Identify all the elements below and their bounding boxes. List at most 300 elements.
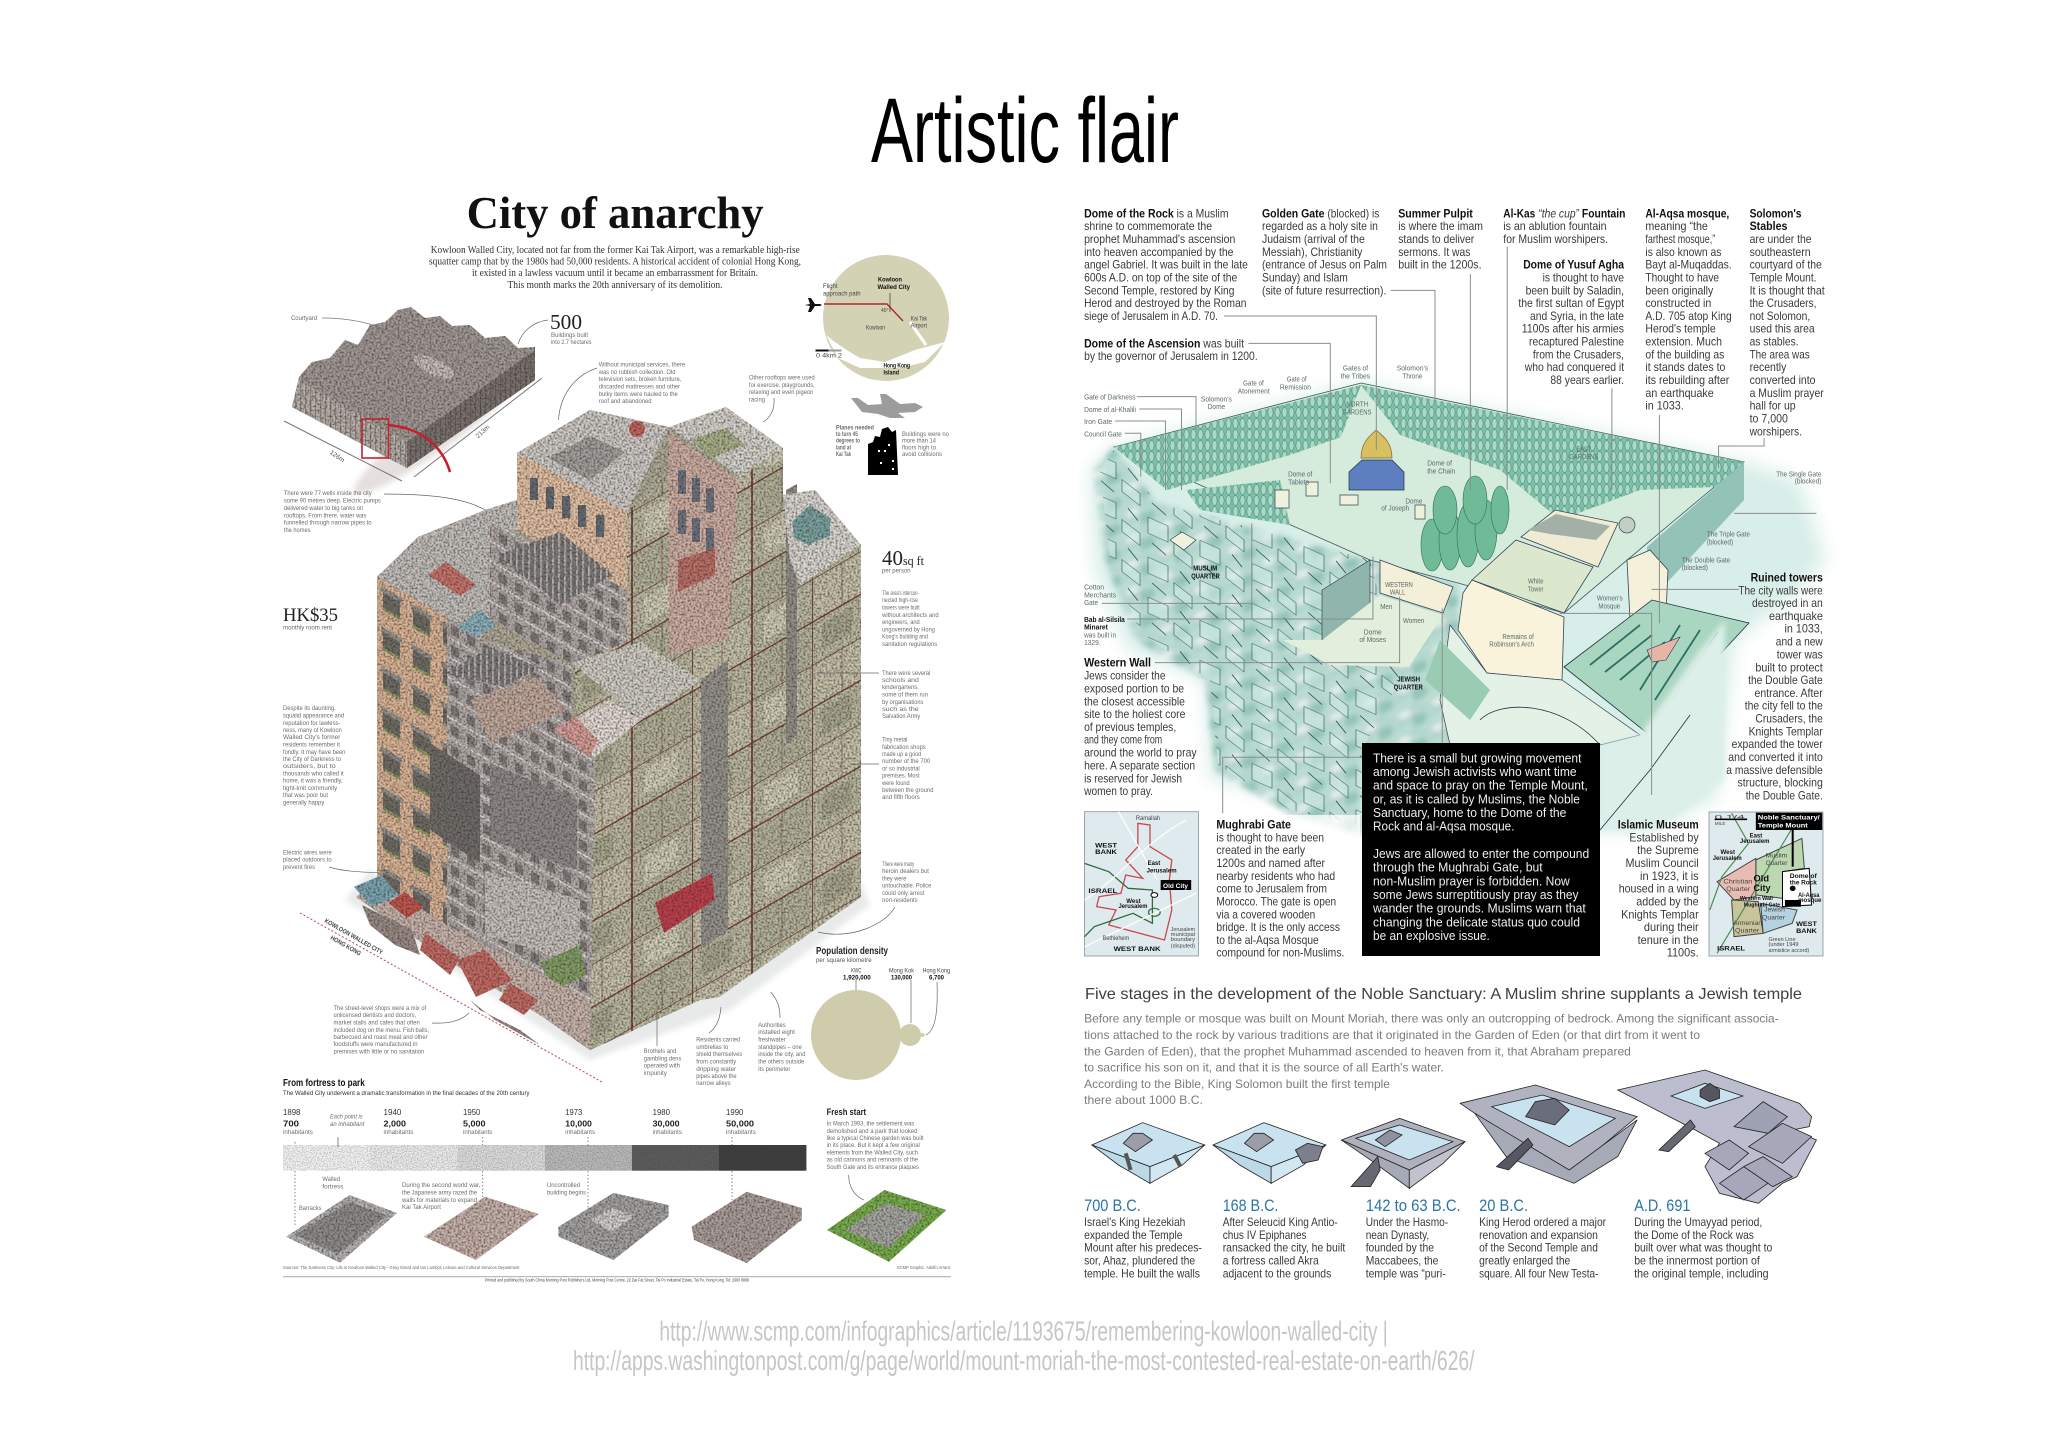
text: Golden Gate: Messiah), Christianity: [1262, 245, 1362, 259]
note: fresh start: in its place. But it kept a few original: [827, 1142, 920, 1149]
note: heroin dealers: There were many: [882, 861, 915, 868]
illustration place labels: Gates of: [1343, 364, 1369, 373]
illustration place labels: Men: [1380, 602, 1392, 611]
terrace: [1472, 540, 1593, 613]
map: Jerusalem region: Jerusalem: [1171, 927, 1195, 933]
black callout: Jewish prayer movement: or, as it is called by Muslims, the Noble: [1373, 792, 1580, 806]
map: Old City quarters: Mughrabi Gate: [1744, 902, 1780, 908]
map: Old City quarters: ISRAEL: [1717, 946, 1745, 952]
map: Jerusalem region: WEST BANK: [1114, 946, 1161, 953]
map: Old City quarters: East: [1750, 832, 1763, 840]
model annotations: Uncontrolled: [547, 1182, 580, 1189]
note: metal fabrication: were found: [881, 780, 910, 787]
dimension line 126m: [284, 421, 402, 481]
map: Jerusalem region: Jerusalem: [1118, 903, 1148, 910]
pink walled block: [471, 677, 568, 743]
chart: population density: [811, 946, 950, 1080]
text: Al-Kas fountain: Al-Kas: [1503, 206, 1536, 220]
callout: rubbish on roofs: television sets, broken furniture,: [599, 376, 681, 383]
locator map: Airport: [911, 322, 927, 330]
note: umbrellas: [696, 1007, 743, 1087]
map: Jerusalem region: WEST: [1095, 842, 1117, 850]
locator map: Island: [884, 370, 899, 376]
roof left tower: [517, 410, 669, 512]
section intro: According to the Bible, King Solomon built the first temple: [1084, 1077, 1390, 1091]
pale pink roof: [554, 700, 641, 757]
text: Ruined towers: and a new: [1776, 635, 1823, 649]
callout: wells: funnelled through narrow pipes to: [284, 520, 372, 526]
sanctuary platform: [1114, 383, 1744, 613]
black callout: Jewish prayer movement: some Jews surreptitiously pray as they: [1373, 888, 1579, 902]
text: Golden Gate: Golden Gate: [1262, 206, 1325, 220]
note: fresh start: Fresh start: [827, 1107, 866, 1117]
illustration place labels: (blocked): [1707, 537, 1733, 546]
text: Western Wall: site to the holiest core: [1084, 707, 1186, 721]
text: Dome of the Rock: Second Temple, restored by King: [1084, 283, 1234, 297]
note: standpipes: Authorities: [758, 1022, 786, 1029]
text: Ruined towers: earthquake: [1769, 609, 1823, 623]
red arrow to main cutaway: [388, 425, 450, 472]
map: Old City quarters: Muslim: [1766, 852, 1788, 860]
note: schools: [816, 670, 931, 720]
text: Ruined towers: [1726, 570, 1823, 803]
note: heroin dealers: untouchable. Police: [882, 882, 931, 890]
text: Ruined towers: Knights Templar: [1749, 724, 1823, 738]
text: Summer Pulpit: is where the imam: [1398, 219, 1483, 233]
text: Dome of Yusuf Agha: [1518, 258, 1625, 387]
text: Ruined towers: the city fell to the: [1745, 699, 1823, 713]
text: Islamic Museum: 1100s.: [1667, 946, 1699, 960]
text: Mughrabi Gate: created in the early: [1216, 843, 1305, 857]
heading: City of anarchy: City of anarchy: [467, 187, 764, 238]
text: Islamic Museum: Islamic Museum: [1618, 817, 1699, 831]
illustration place labels: Solomon's: [1397, 364, 1428, 373]
note: electric wires: placed outdoors to: [283, 856, 332, 864]
timeline labels: inhabitants: [726, 1129, 756, 1136]
illustration place labels: Remains of: [1502, 632, 1535, 641]
note: former residents: squalid appearance and: [283, 712, 344, 720]
women's plaza / Dome of Moses ground: [1283, 595, 1443, 667]
chart: population density: Mong Kok: [889, 968, 915, 974]
note: street-level shops: foodstuffs were manufactured in: [334, 1041, 418, 1048]
stage 1 text: sor, Ahaz, plundered the: [1084, 1254, 1195, 1268]
note: planes turn 45 degrees: Kai Tak: [836, 451, 851, 458]
stage 2 text: ransacked the city, he built: [1223, 1241, 1346, 1255]
section subheading: The Walled City underwent a dramatic transformation in the final decades of the 20th century: [283, 1090, 530, 1097]
note: interconnected towers: without architects and: [881, 612, 939, 619]
map: Jerusalem region: Jerusalem: [1147, 868, 1177, 874]
uncontrolled building model 1973: [558, 1193, 669, 1260]
text: Western Wall: [1083, 656, 1197, 798]
illustration place labels: the Tribes: [1340, 371, 1370, 380]
black callout: Jewish prayer movement: [1362, 743, 1600, 956]
stage 3 text: [1366, 1215, 1448, 1280]
credits and print line: [283, 1265, 951, 1282]
text: Al-Aqsa mosque: Al-Aqsa mosque,: [1645, 206, 1729, 220]
note: electric wires: prevent fires: [283, 864, 316, 871]
pale lower shopfront block: [485, 870, 580, 963]
note: schools: some of them run: [882, 692, 928, 698]
model annotations: During the second world war,: [402, 1182, 480, 1189]
text: Ruined towers: Crusaders, the: [1755, 711, 1823, 725]
note: 14 floors limit: more than 14: [902, 438, 936, 444]
stage dates: A.D. 691: [1634, 1196, 1690, 1215]
park model: [827, 1190, 946, 1262]
text: Dome of the Ascension: by the governor of Jerusalem in 1200.: [1084, 349, 1258, 363]
stage 3 text: founded by the: [1366, 1241, 1434, 1255]
text: Al-Aqsa mosque: in 1033.: [1645, 399, 1684, 413]
text: Al-Aqsa mosque: an earthquake: [1645, 386, 1714, 400]
illustration place labels: White: [1528, 577, 1544, 586]
map: Jerusalem region: Ramallah: [1136, 815, 1160, 822]
section heading: From fortress to park: [283, 1078, 365, 1089]
text: Dome of Yusuf Agha: and Syria, in the late: [1530, 309, 1624, 323]
note: former residents: [283, 705, 346, 806]
model annotations: [299, 1176, 587, 1212]
text: Golden Gate: (site of future resurrection).: [1262, 283, 1386, 297]
text: Golden Gate: [1262, 206, 1387, 297]
note: planes turn 45 degrees: [836, 424, 874, 458]
text: Ruined towers: expanded the tower: [1732, 737, 1823, 751]
text: Mughrabi Gate: is thought to have been: [1216, 830, 1324, 844]
text: Solomon's Stables: Temple Mount.: [1750, 270, 1816, 284]
text: Golden Gate: Sunday) and Islam: [1262, 270, 1348, 284]
model annotations: walls for materials to expand: [401, 1197, 477, 1204]
callout: wells: There were 77 wells inside the city: [284, 490, 372, 497]
callout: rooftops: relaxing and even pigeon: [749, 389, 813, 396]
dimension line 213m: [414, 378, 542, 477]
locator map: Kowloon: [878, 276, 902, 284]
text: Western Wall: women to pray.: [1083, 784, 1153, 798]
stage 3 text: Maccabees, the: [1366, 1254, 1439, 1268]
illustration place labels: GARDENS: [1569, 452, 1598, 461]
text: Solomon's Stables: the Crusaders,: [1750, 296, 1816, 310]
text: Ruined towers: structure, blocking: [1738, 776, 1823, 790]
text: Dome of Yusuf Agha: the first sultan of Egypt: [1518, 296, 1625, 310]
map: Old City quarters: Quarter: [1735, 928, 1760, 934]
central cypress cluster: [1421, 476, 1509, 571]
text: Dome of the Rock: into heaven accompanied by the: [1084, 245, 1234, 259]
map: Old City quarters: MILE: [1715, 821, 1725, 826]
illustration place labels: Dome of: [1427, 459, 1453, 468]
illustration place labels: was built in: [1083, 630, 1116, 639]
map: Jerusalem region: ISRAEL: [1088, 888, 1117, 895]
chart: population density: per square kilometre: [816, 957, 872, 964]
intro text: This month marks the 20th anniversary of its demolition.: [508, 280, 722, 291]
population noise strip: [283, 1145, 806, 1171]
boundary labels: KOWLOON WALLED CITY: [323, 918, 384, 957]
illustration place labels: Dome of al-Khalili: [1084, 405, 1136, 414]
note: umbrellas: dripping water: [696, 1066, 737, 1073]
stage 2 text: After Seleucid King Antio-: [1223, 1215, 1338, 1229]
locator map: Kai Tak: [911, 316, 928, 322]
note: metal fabrication: made up a good: [882, 751, 921, 758]
note: interconnected towers: engineers, and: [882, 619, 920, 626]
illustration place labels: JEWISH: [1397, 675, 1420, 684]
label 126m: 126m: [328, 449, 346, 464]
text: Al-Aqsa mosque: Herod's temple: [1645, 322, 1716, 336]
callout: wells: some 90 metres deep. Electric pumps: [284, 498, 381, 504]
text: Mughrabi Gate: Morocco. The gate is open: [1216, 894, 1336, 908]
stage models: [1092, 1070, 1816, 1203]
stage dates: 700 B.C.: [1084, 1196, 1141, 1215]
label: courtyard: Courtyard: [291, 315, 317, 322]
text: Dome of the Rock: shrine to commemorate the: [1084, 219, 1212, 233]
building base silhouette: [356, 407, 861, 1050]
note: street-level shops: unlicensed dentists and doctors,: [334, 1012, 416, 1019]
illustration place labels: Dome of: [1288, 470, 1313, 479]
timeline labels: 5,000: [463, 1118, 486, 1128]
note: street-level shops: [334, 1005, 469, 1056]
note: standpipes: inside the city, and: [758, 1051, 806, 1058]
illustration place labels: of Moses: [1359, 635, 1386, 644]
cutaway illustration of the walled city: [345, 407, 870, 1060]
sectional rooms facade: [572, 448, 861, 1050]
stat: 500 buildings: [518, 310, 592, 346]
callout: rubbish on roofs: roof and abandoned: [599, 398, 652, 405]
illustration place labels: MUSLIM: [1193, 564, 1217, 573]
illustration place labels: (blocked): [1795, 477, 1822, 486]
icon: plane silhouette: [851, 394, 923, 418]
note: heroin dealers: could only arrest: [882, 890, 924, 897]
stage 5 text: the Dome of the Rock was: [1634, 1228, 1754, 1242]
text: Islamic Museum: added by the: [1636, 894, 1699, 908]
central grey facade: [447, 617, 595, 1050]
text: Solomon's Stables: worshipers.: [1749, 425, 1802, 439]
balcony block: [490, 520, 627, 665]
overview block of the walled city: [284, 307, 542, 506]
note: brothels: impunity: [644, 1070, 667, 1077]
illustration place labels: Council Gate: [1084, 429, 1122, 438]
right block roof: [783, 490, 861, 585]
text: Dome of Yusuf Agha: recaptured Palestine: [1529, 334, 1624, 348]
note: fresh start: elements from the Walled City, such: [827, 1150, 918, 1156]
illustration place labels: Gate: [1084, 598, 1098, 607]
illustration place labels: The Single Gate: [1776, 469, 1821, 478]
note: street-level shops: included dog on the menu. Fish balls,: [334, 1027, 429, 1034]
map: Old City quarters: Quarter: [1762, 914, 1786, 922]
blue striped awning: [354, 875, 398, 907]
section heading: Five stages in the development of the Noble Sanctuary: A Muslim shrine supplants a Jewish temple: [1085, 986, 1802, 1003]
note: interconnected towers: towers were built: [882, 604, 920, 612]
map: Jerusalem region: Bethlehem: [1102, 935, 1130, 942]
section intro: Before any temple or mosque was built on Mount Moriah, there was only an outcropping of bedrock. Among the significant associa-: [1084, 1012, 1779, 1026]
note: fresh start: like a typical Chinese garden was built: [827, 1135, 924, 1142]
text: Mughrabi Gate: 1200s and named after: [1216, 856, 1325, 870]
illustration place labels: Throne: [1402, 371, 1422, 380]
text: Islamic Museum: Established by: [1629, 830, 1699, 844]
pink awning on roof: [428, 562, 476, 596]
text: Al-Aqsa mosque: Bayt al-Muqaddas.: [1645, 258, 1732, 272]
note: brothels: operated with: [644, 1062, 680, 1070]
locator map: approach path: [823, 290, 861, 298]
stage 1 text: [1084, 1215, 1202, 1280]
stat: HK$35 rent: monthly room rent: [283, 624, 332, 632]
intro text: [429, 245, 801, 291]
text: Islamic Museum: during their: [1644, 920, 1699, 934]
leader lines: [1102, 247, 1816, 813]
stage 3 text: nean Dynasty,: [1366, 1228, 1429, 1242]
timeline labels: Each point is: [330, 1114, 363, 1120]
east wall tree band: [1361, 385, 1744, 520]
illustration place labels: The Double Gate: [1682, 556, 1730, 565]
note: former residents: home, it was a friendly,: [283, 778, 343, 784]
map: Old City quarters: BANK: [1796, 928, 1817, 935]
map: Old City quarters: Jewish: [1764, 906, 1785, 914]
stage dates: 20 B.C.: [1479, 1196, 1528, 1215]
illustration place labels: Minaret: [1084, 623, 1108, 632]
stage 1 text: Israel's King Hezekiah: [1084, 1215, 1185, 1229]
text: Al-Aqsa mosque: [1645, 206, 1732, 413]
illustration: aerial view of the Old City and Noble Sanctuary: [1090, 383, 1826, 835]
illustration place labels: (blocked): [1682, 563, 1708, 572]
text: Mughrabi Gate: nearby residents who had: [1216, 869, 1335, 883]
note: heroin dealers: heroin dealers but: [882, 868, 929, 875]
stage 2 text: [1223, 1215, 1346, 1280]
roof right tower: [669, 407, 783, 477]
illustration place labels: NORTH: [1346, 400, 1368, 409]
intro text: squatter camp that by the 1980s had 50,000 residents. A historical accident of colonial Hong Kong,: [429, 256, 801, 268]
callout: rubbish on roofs: bulky items were hauled to the: [599, 391, 678, 398]
timeline labels: 30,000: [653, 1118, 680, 1128]
text: Islamic Museum: [1618, 817, 1699, 960]
text: Solomon's Stables: used this area: [1750, 322, 1815, 336]
text: Western Wall: Jews consider the: [1084, 668, 1166, 682]
note: fresh start: [827, 1107, 924, 1200]
text: Al-Kas fountain: for Muslim worshipers.: [1503, 232, 1608, 246]
text: Ruined towers: in 1033,: [1784, 622, 1823, 636]
note: umbrellas: pipes above the: [696, 1073, 737, 1080]
text: Dome of the Ascension: was built: [1202, 336, 1245, 350]
text: Al-Kas fountain: Fountain: [1582, 206, 1626, 220]
tree row along west wall: [1186, 480, 1290, 525]
callout: wells: [284, 490, 485, 534]
text: Dome of Yusuf Agha: 88 years earlier.: [1550, 373, 1624, 387]
model annotations: building begins: [547, 1190, 587, 1196]
text: Ruined towers: the Double Gate.: [1746, 789, 1823, 803]
locator map: Walled City: [878, 284, 910, 291]
map: Jerusalem region: West: [1126, 898, 1141, 905]
note: metal fabrication: and fifth floors: [882, 794, 920, 801]
text: Ruined towers: and converted it into: [1728, 750, 1823, 764]
pink tower column: [669, 432, 738, 655]
timeline labels: inhabitants: [463, 1129, 493, 1136]
text: Mughrabi Gate: [1210, 815, 1360, 961]
text: Western Wall: of previous temples,: [1084, 720, 1176, 734]
lower ramp and wall: [1440, 625, 1640, 745]
map: Old City quarters: West: [1720, 849, 1736, 856]
teal rooftop hut: [792, 505, 830, 545]
ruined towers: [1627, 550, 1668, 620]
red highlight box: [362, 419, 388, 458]
model annotations: Barracks: [299, 1205, 322, 1212]
source URLs footer: http://www.scmp.com/infographics/article/1193675/remembering-kowloon-walled-city |: [659, 1316, 1388, 1347]
text: Western Wall: exposed portion to be: [1084, 681, 1184, 695]
timeline labels: inhabitants: [653, 1129, 682, 1136]
text: Summer Pulpit: stands to deliver: [1398, 232, 1474, 246]
label 213m: 213m: [475, 424, 491, 440]
map: Old City quarters: Western Wall: [1740, 896, 1774, 902]
illustration place labels: 1329.: [1084, 638, 1101, 647]
text: Western Wall: around the world to pray: [1084, 746, 1197, 760]
map: Old City quarters: (under 1949: [1768, 942, 1798, 948]
note: schools: schools and: [882, 677, 919, 684]
chart: population density: 1,920,000: [843, 974, 871, 982]
credits and print line: Sources: The Darkness City: Life in Kowloon Walled City - Greg Girard and Ian Lambot; Leisure and Cultural Services Department: [283, 1265, 520, 1271]
text: Dome of Yusuf Agha: who had conquered it: [1524, 360, 1625, 374]
stat: 40 sq ft: per person: [882, 568, 911, 574]
text: Solomon's Stables: courtyard of the: [1750, 258, 1822, 272]
timeline labels: 1950: [463, 1108, 481, 1117]
stage 4 text: of the Second Temple and: [1479, 1241, 1598, 1255]
stage 4 text: square. All four New Testa-: [1479, 1266, 1598, 1280]
callout: rooftops: Other rooftops were used: [749, 374, 815, 382]
illustration place labels: Tower: [1528, 584, 1544, 593]
concrete terrace: [572, 642, 701, 720]
note: former residents: Walled City's former: [283, 734, 341, 741]
illustration place labels: the Chain: [1427, 467, 1455, 476]
map: Old City quarters: Quarter: [1766, 860, 1788, 867]
grey stair shaft: [701, 660, 728, 950]
note: electric wires: [283, 850, 383, 873]
note: standpipes: freshwater: [758, 1036, 786, 1044]
map: Old City quarters: City: [1754, 883, 1770, 893]
black callout: Jewish prayer movement: be an explosive issue.: [1373, 929, 1490, 943]
timeline labels: inhabitants: [283, 1129, 313, 1136]
text: Dome of the Rock: [1084, 206, 1248, 323]
timeline labels: 1990: [726, 1108, 744, 1117]
text: Al-Aqsa mosque: been originally: [1645, 283, 1713, 297]
text: Mughrabi Gate: to the al-Aqsa Mosque: [1216, 933, 1319, 947]
callout: wells: the homes: [284, 527, 311, 534]
chart: population density: 6,700: [929, 974, 944, 982]
text: Western Wall: here. A separate section: [1084, 758, 1195, 772]
stage 3 model: [1341, 1118, 1465, 1188]
text: Western Wall: the closest accessible: [1084, 694, 1185, 708]
text: Islamic Museum: Knights Templar: [1621, 907, 1699, 921]
black callout: Jewish prayer movement: changing the delicate status quo could: [1373, 915, 1580, 929]
illustration place labels: Cotton: [1084, 583, 1104, 592]
note: standpipes: [758, 992, 806, 1073]
dark corrugated roof: [446, 647, 540, 687]
note: interconnected towers: The area's intercon-: [882, 590, 919, 597]
black callout: Jewish prayer movement: non-Muslim prayer is forbidden. Now: [1373, 874, 1571, 888]
note: umbrellas: Residents carried: [696, 1036, 740, 1044]
note: fresh start: demolished and a park that looked: [827, 1128, 918, 1135]
note: former residents: outsiders, but to: [283, 763, 336, 770]
text: Summer Pulpit: Summer Pulpit: [1398, 206, 1473, 220]
stage 5 text: built over what was thought to: [1634, 1241, 1773, 1255]
Al-Aqsa hall: [1521, 510, 1635, 567]
stage 5 text: the original temple, including: [1634, 1266, 1768, 1280]
chart: population density: Population density: [816, 946, 888, 957]
text: Solomon's Stables: It is thought that: [1750, 283, 1825, 297]
map: Jerusalem region: [1084, 812, 1198, 956]
timeline labels: inhabitants: [384, 1129, 414, 1136]
western wall: [1380, 560, 1453, 613]
text: Al-Aqsa mosque: Thought to have: [1645, 270, 1719, 284]
label: courtyard: [291, 315, 421, 367]
callout: rubbish on roofs: discarded mattresses and other: [599, 384, 681, 390]
note: former residents: residents remember it: [283, 742, 340, 748]
text: Mughrabi Gate: compound for non-Muslims.: [1216, 946, 1344, 960]
stage 2 text: a fortress called Akra: [1223, 1254, 1319, 1268]
text: Al-Aqsa mosque: A.D. 705 atop King: [1645, 309, 1732, 323]
model annotations: fortress: [322, 1184, 344, 1190]
text: Golden Gate: regarded as a holy site in: [1262, 219, 1378, 233]
upper left tower facade: [517, 453, 627, 590]
stage 1 text: expanded the Temple: [1084, 1228, 1183, 1242]
